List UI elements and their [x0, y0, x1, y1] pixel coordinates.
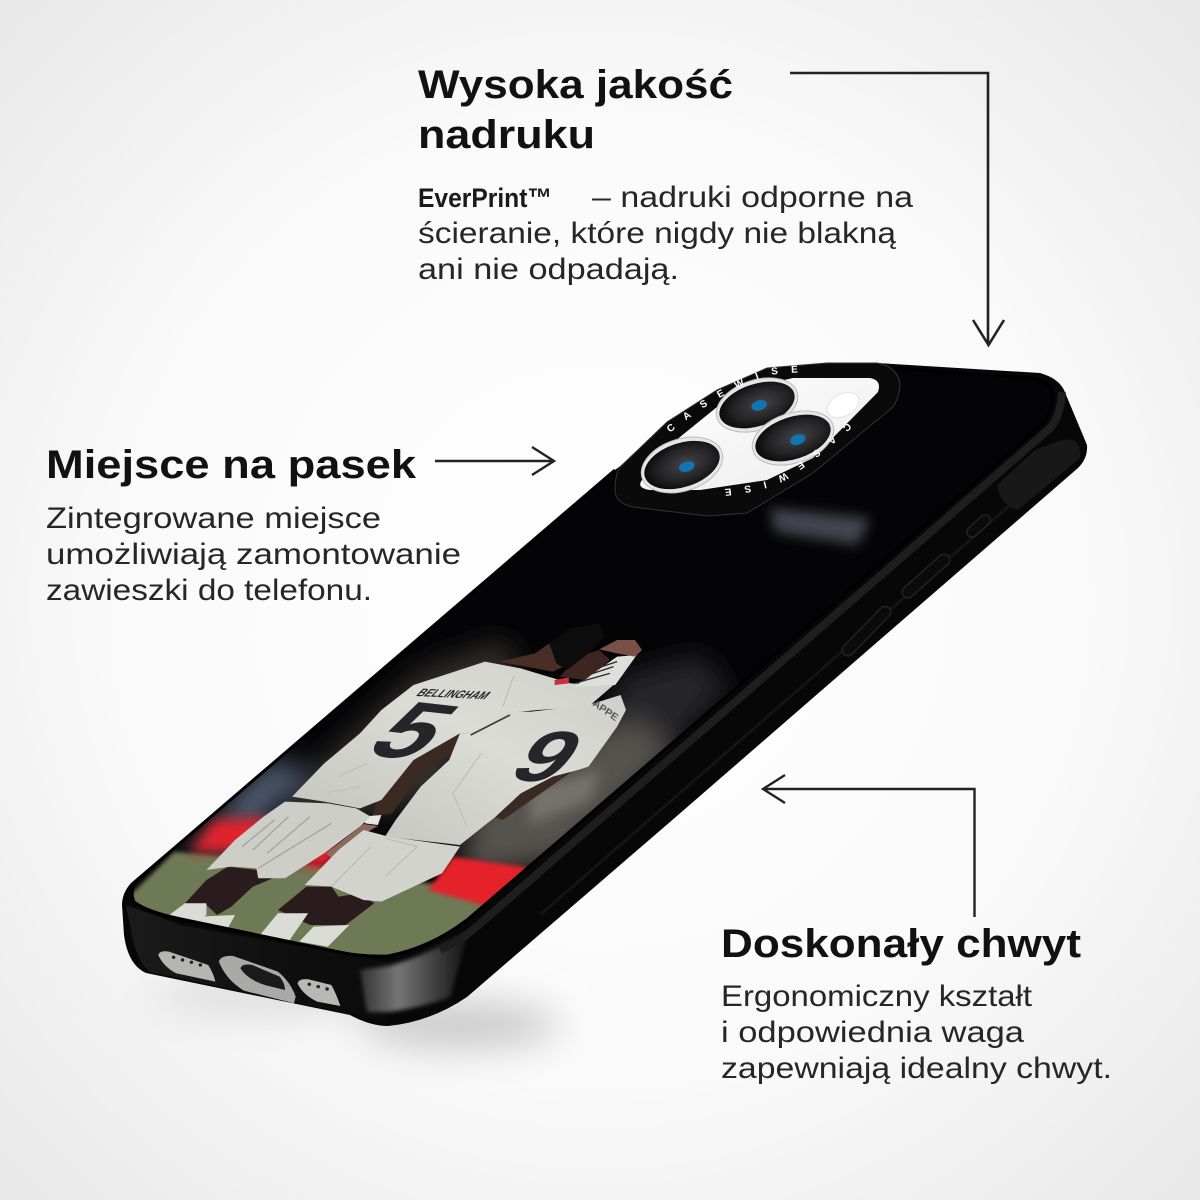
jersey number 5 — [292, 662, 614, 808]
text block: grip description: Ergonomiczny kształt — [721, 980, 1033, 1013]
arrow: grip to phone side — [763, 775, 974, 917]
bottom face of the case — [126, 905, 470, 1024]
left speaker — [158, 951, 215, 982]
shorts number 9 — [305, 830, 460, 902]
pitch — [134, 850, 484, 955]
name print 2: APPE — [591, 698, 620, 724]
sleeve — [574, 655, 637, 687]
side button: action — [972, 520, 985, 532]
lens right — [745, 401, 841, 475]
text block: print quality description: EverPrint™ — [418, 183, 552, 213]
socks and boots — [167, 903, 349, 947]
arrow: print quality to phone back — [790, 73, 1004, 345]
camera module — [614, 362, 900, 516]
red advertising board left — [190, 818, 345, 870]
camera ring — [615, 363, 900, 516]
heading: strap slot: Miejsce na pasek — [46, 443, 417, 487]
blurred stadium background — [120, 508, 870, 965]
shorts number 5 — [206, 802, 371, 878]
callout: print quality — [418, 63, 913, 286]
text block: strap slot description: umożliwiają zamontowanie — [46, 538, 461, 571]
number 9 print: 9 — [493, 714, 603, 798]
legs — [185, 867, 374, 925]
text block: strap slot description — [46, 502, 461, 607]
players — [167, 623, 642, 947]
callout: strap slot — [46, 443, 461, 607]
number 5 print: 5 — [346, 685, 480, 777]
camera island — [640, 378, 879, 490]
case body — [122, 363, 1087, 1026]
text block: grip description: zapewniają idealny chwyt. — [721, 1052, 1112, 1085]
arrow: strap slot to phone — [435, 447, 554, 475]
necks and heads — [499, 623, 642, 680]
text block: grip description — [721, 980, 1112, 1085]
charging port and speakers — [158, 951, 340, 1006]
glossy highlight on bottom corner — [360, 928, 470, 1012]
CASEWISE ring text top: CASEWISE — [667, 366, 798, 432]
light stand strip — [530, 770, 600, 825]
CASEWISE ring text bottom: CASEWISE — [724, 424, 851, 496]
heading: print quality: Wysoka jakość — [418, 63, 733, 107]
screen edge highlight — [132, 367, 1053, 956]
phone case — [122, 362, 1088, 1026]
strap slot bump — [997, 439, 1080, 510]
blurred stand highlight — [770, 508, 870, 545]
text block: grip description: i odpowiednia waga — [721, 1016, 1024, 1049]
heading: grip: Doskonały chwyt — [721, 922, 1081, 966]
name print: BELLINGHAM — [412, 687, 494, 702]
right speaker — [297, 979, 340, 1006]
side bumper — [440, 392, 1080, 950]
text block: print quality description: – nadruki odporne na — [592, 181, 913, 214]
heading: print quality — [418, 63, 733, 157]
callout: grip — [721, 922, 1112, 1085]
phone shadow — [150, 977, 560, 1047]
red advertising board right — [428, 857, 540, 907]
lens left — [634, 427, 730, 503]
text block: print quality description: ani nie odpadają. — [418, 253, 679, 286]
forearm and hand — [326, 735, 574, 858]
league patch — [555, 677, 569, 685]
lens top — [709, 368, 805, 442]
text block: print quality description — [418, 181, 913, 286]
USB port — [219, 956, 296, 1003]
side button: upper volume — [908, 560, 944, 592]
heading: print quality: nadruku — [418, 113, 595, 157]
side button: lower volume — [848, 612, 885, 650]
text block: print quality description: ścieranie, które nigdy nie blakną — [418, 217, 896, 250]
printed photo on back — [134, 468, 874, 955]
text block: strap slot description: zawieszki do telefonu. — [46, 574, 372, 607]
text block: strap slot description: Zintegrowane miejsce — [46, 502, 381, 535]
jersey number 9 — [385, 695, 626, 845]
flash — [823, 387, 863, 423]
